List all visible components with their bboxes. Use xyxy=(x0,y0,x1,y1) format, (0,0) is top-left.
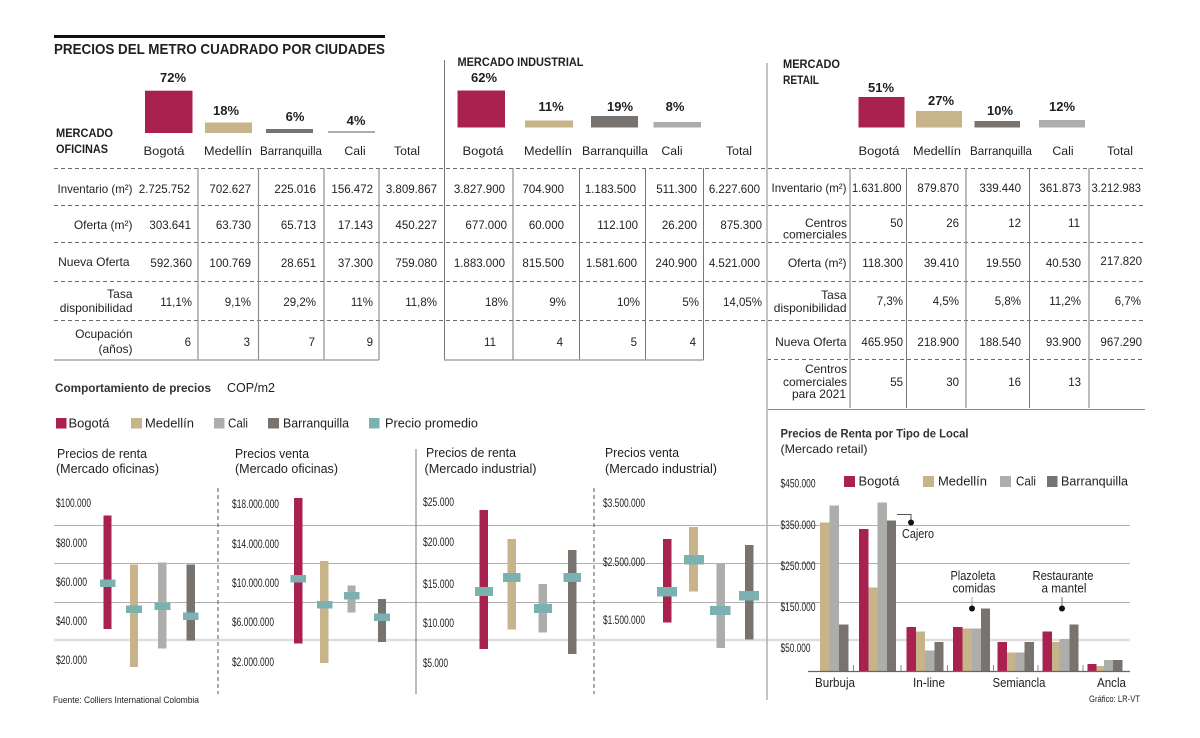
callout: restaurante a mantel: a mantel xyxy=(1042,582,1086,596)
table: retail: comerciales xyxy=(783,375,847,389)
x axis: Burbuja xyxy=(815,676,855,690)
table: oficinas: 3.809.867 xyxy=(386,184,437,196)
chart: precios venta, mercado industrial: $1.500.000 xyxy=(603,615,645,627)
chart: precios de renta, mercado oficinas: $60.000 xyxy=(56,577,87,589)
chart: precios venta, mercado oficinas: (Mercado oficinas) xyxy=(235,462,338,476)
heading: comportamiento de precios: Comportamiento de precios xyxy=(55,381,211,395)
title: PRECIOS DEL METRO CUADRADO POR CIUDADES xyxy=(54,41,385,58)
share bars: retail: 51% xyxy=(868,80,894,95)
chart: precios de renta, mercado oficinas: (Mercado oficinas) xyxy=(56,462,159,476)
share bars: oficinas: 72% xyxy=(160,70,186,85)
column headers: oficinas: Total xyxy=(394,144,420,158)
legend: ciudades y precio promedio: Barranquilla xyxy=(283,416,349,430)
heading: comportamiento de precios: COP/m2 xyxy=(227,381,275,395)
chart heading: Precios de Renta por Tipo de Local xyxy=(780,426,968,440)
table: retail: 339.440 xyxy=(979,183,1021,195)
chart: precios venta, mercado oficinas: $14.000.000 xyxy=(232,539,279,551)
y axis labels: $250.000 xyxy=(780,561,816,573)
column headers: oficinas: Medellín xyxy=(204,144,252,158)
table: retail: 118.300 xyxy=(862,258,903,270)
column headers: oficinas: Barranquilla xyxy=(260,144,322,158)
table: oficinas: Nueva Oferta xyxy=(58,255,130,269)
column headers: retail: Cali xyxy=(1052,144,1074,158)
y axis labels: $150.000 xyxy=(780,602,816,614)
chart: precios venta, mercado industrial: $3.500.000 xyxy=(603,498,645,510)
table: retail: para 2021 xyxy=(792,387,846,401)
chart: precios venta, mercado industrial: (Mercado industrial) xyxy=(605,462,717,476)
y axis labels: $350.000 xyxy=(780,520,816,532)
table: industrial: 14,05% xyxy=(723,297,762,309)
panel: mercado industrial xyxy=(444,57,762,360)
table: industrial: 11 xyxy=(484,337,496,349)
table: oficinas: 37.300 xyxy=(338,258,373,270)
callout: cajero xyxy=(897,514,934,541)
table: industrial: 677.000 xyxy=(465,220,507,232)
legend: ciudades y precio promedio: Precio promedio xyxy=(385,416,478,430)
chart: precios venta, mercado oficinas: $18.000.000 xyxy=(232,499,279,511)
chart: precios venta, mercado oficinas xyxy=(232,447,390,669)
table: industrial: 112.100 xyxy=(597,220,638,232)
table: industrial: 18% xyxy=(485,297,508,309)
table: retail: 6,7% xyxy=(1115,296,1141,308)
table: retail: Tasa xyxy=(821,288,847,302)
chart: precios de renta, mercado oficinas: $20.000 xyxy=(56,655,87,667)
table: retail: 967.290 xyxy=(1100,337,1142,349)
share bars: retail: 10% xyxy=(987,103,1013,118)
table: retail: disponibilidad xyxy=(774,301,846,315)
table: oficinas: 63.730 xyxy=(216,220,251,232)
table: retail: 1.631.800 xyxy=(852,183,902,195)
table: retail: 11 xyxy=(1068,218,1080,230)
table: retail: Centros xyxy=(805,362,847,376)
heading: mercado retail: MERCADO xyxy=(783,59,840,71)
table: retail xyxy=(767,168,1145,410)
table: industrial: 26.200 xyxy=(662,220,697,232)
y axis labels xyxy=(780,478,816,655)
table: retail: Oferta (m²) xyxy=(788,256,846,270)
chart: precios de renta, mercado industrial: (Mercado industrial) xyxy=(424,462,536,476)
chart: precios venta, mercado oficinas: $2.000.000 xyxy=(232,657,274,669)
table: retail: 26 xyxy=(946,218,959,230)
table: retail: 16 xyxy=(1008,377,1021,389)
heading: mercado oficinas: MERCADO xyxy=(56,128,113,140)
table: industrial: 1.183.500 xyxy=(585,184,636,196)
column headers: oficinas: Bogotá xyxy=(144,144,185,158)
table: oficinas: 65.713 xyxy=(281,220,316,232)
table: retail: 7,3% xyxy=(877,296,903,308)
table: retail: Inventario (m²) xyxy=(772,181,846,195)
column headers: retail: Bogotá xyxy=(858,144,900,158)
table: oficinas: 11,1% xyxy=(160,297,192,309)
chart: precios de renta, mercado industrial: $15.000 xyxy=(423,579,454,591)
heading: mercado retail: RETAIL xyxy=(783,75,819,87)
column headers: retail xyxy=(858,144,1133,158)
table: oficinas: Ocupación xyxy=(75,327,132,341)
table: industrial: 4 xyxy=(690,337,697,349)
share bars: retail: 12% xyxy=(1049,99,1075,114)
table: industrial: 6.227.600 xyxy=(709,184,760,196)
table: oficinas: 11% xyxy=(351,297,373,309)
chart: precios de renta, mercado industrial: $10.000 xyxy=(423,618,454,630)
column headers: industrial: Total xyxy=(726,144,752,158)
table: retail: 218.900 xyxy=(917,337,959,349)
chart: precios de renta, mercado oficinas: $80.000 xyxy=(56,538,87,550)
table: retail: 55 xyxy=(890,377,903,389)
share bars: oficinas: 4% xyxy=(347,113,366,128)
table: oficinas: Tasa xyxy=(107,287,133,301)
chart: precios de renta, mercado industrial: $5.000 xyxy=(423,658,448,670)
title xyxy=(54,35,385,58)
table: retail: Centros xyxy=(805,216,847,230)
table: oficinas: 225.016 xyxy=(274,184,316,196)
table: oficinas: 9 xyxy=(367,337,373,349)
legend: retail: Barranquilla xyxy=(1061,474,1128,488)
table: industrial: 875.300 xyxy=(720,220,762,232)
table: retail: 4,5% xyxy=(933,296,959,308)
chart: precios venta, mercado oficinas: $6.000.000 xyxy=(232,617,274,629)
table: oficinas: (años) xyxy=(98,342,133,356)
table: industrial: 9% xyxy=(549,297,566,309)
heading: mercado oficinas: OFICINAS xyxy=(56,144,108,156)
table: retail: comerciales xyxy=(783,228,847,242)
table: oficinas: 702.627 xyxy=(209,184,251,196)
table: industrial: 10% xyxy=(617,297,640,309)
table: oficinas: 9,1% xyxy=(225,297,251,309)
table: oficinas: Oferta (m²) xyxy=(74,218,132,232)
chart: precios de renta, mercado industrial: $20.000 xyxy=(423,537,454,549)
chart: precios de renta, mercado oficinas: $40.000 xyxy=(56,616,87,628)
table: oficinas: 156.472 xyxy=(331,184,373,196)
y axis labels: $450.000 xyxy=(780,478,816,490)
table: retail: 12 xyxy=(1008,218,1021,230)
table: oficinas: 3 xyxy=(244,337,250,349)
table: retail: 879.870 xyxy=(917,183,959,195)
heading: mercado industrial: MERCADO INDUSTRIAL xyxy=(458,57,584,69)
table: retail: 93.900 xyxy=(1046,337,1081,349)
legend: ciudades y precio promedio: Bogotá xyxy=(68,416,110,430)
table: industrial: 4.521.000 xyxy=(709,258,760,270)
legend: retail: Medellín xyxy=(938,474,987,488)
column headers: retail: Barranquilla xyxy=(970,144,1032,158)
share bars: oficinas xyxy=(145,70,375,133)
heading: mercado oficinas xyxy=(56,128,113,156)
table: retail: 30 xyxy=(946,377,959,389)
table: retail: 11,2% xyxy=(1049,296,1081,308)
chart: precios de renta, mercado industrial: Precios de renta xyxy=(426,446,516,460)
column headers: industrial: Cali xyxy=(661,144,683,158)
bars: ancla xyxy=(1088,660,1122,671)
callout: plazoleta comidas: comidas xyxy=(952,582,996,596)
table: industrial: 5% xyxy=(682,297,699,309)
credit: Gráfico: LR-VT xyxy=(1089,694,1140,705)
chart: precios venta, mercado oficinas: Precios venta xyxy=(235,447,309,461)
legend: retail xyxy=(844,474,1128,488)
bars: semiancla xyxy=(998,624,1078,671)
share bars: oficinas: 18% xyxy=(213,103,239,118)
table: industrial xyxy=(444,60,762,360)
legend: retail: Cali xyxy=(1016,474,1036,488)
x axis: Semiancla xyxy=(992,676,1046,690)
callout: plazoleta comidas xyxy=(950,569,996,612)
callout: plazoleta comidas: Plazoleta xyxy=(950,569,996,583)
table: oficinas: Inventario (m²) xyxy=(58,182,132,196)
bars: burbuja xyxy=(820,502,896,671)
heading: mercado retail xyxy=(783,59,840,87)
table: oficinas: 759.080 xyxy=(395,258,437,270)
share bars: retail: 27% xyxy=(928,93,954,108)
legend: ciudades y precio promedio: Medellín xyxy=(145,416,194,430)
column headers: oficinas: Cali xyxy=(344,144,366,158)
table: retail: Nueva Oferta xyxy=(775,335,847,349)
share bars: industrial: 19% xyxy=(607,99,633,114)
table: industrial: 5 xyxy=(631,337,637,349)
table: oficinas: 28.651 xyxy=(281,258,316,270)
table: oficinas: 29,2% xyxy=(283,297,316,309)
chart heading xyxy=(780,426,968,456)
table: oficinas: 7 xyxy=(309,337,315,349)
x axis xyxy=(808,665,1130,690)
callout: restaurante a mantel: Restaurante xyxy=(1032,569,1094,583)
column headers: oficinas xyxy=(144,144,420,158)
table: industrial: 511.300 xyxy=(656,184,697,196)
share bars: industrial: 62% xyxy=(471,70,497,85)
table: industrial: 1.581.600 xyxy=(586,258,637,270)
chart: precios de renta, mercado oficinas: Precios de renta xyxy=(57,447,147,461)
table: industrial: 704.900 xyxy=(522,184,564,196)
share bars: industrial: 8% xyxy=(666,99,685,114)
legend: ciudades y precio promedio: Cali xyxy=(228,416,248,430)
chart: precios venta, mercado industrial xyxy=(603,446,759,648)
callout: restaurante a mantel xyxy=(1032,569,1094,612)
table: industrial: 60.000 xyxy=(529,220,564,232)
table: industrial: 3.827.900 xyxy=(454,184,505,196)
table: industrial: 4 xyxy=(557,337,564,349)
table: industrial: 1.883.000 xyxy=(454,258,505,270)
share bars: oficinas: 6% xyxy=(286,109,305,124)
legend: ciudades y precio promedio xyxy=(56,416,478,430)
table: oficinas: 100.769 xyxy=(209,258,251,270)
column headers: retail: Total xyxy=(1107,144,1133,158)
chart heading: (Mercado retail) xyxy=(780,442,868,456)
table: retail: 465.950 xyxy=(861,337,903,349)
table: retail: 40.530 xyxy=(1046,258,1081,270)
table: oficinas: 17.143 xyxy=(338,220,373,232)
panel: mercado retail xyxy=(767,59,1145,410)
chart: precios de renta por tipo de local xyxy=(780,426,1130,690)
table: retail: 13 xyxy=(1068,377,1081,389)
table: retail: 361.873 xyxy=(1039,183,1081,195)
legend: retail: Bogotá xyxy=(858,474,900,488)
column headers: retail: Medellín xyxy=(913,144,961,158)
table: oficinas: 592.360 xyxy=(150,258,192,270)
table: oficinas: 2.725.752 xyxy=(139,184,190,196)
bars: in-line xyxy=(906,608,990,671)
chart: precios de renta, mercado oficinas xyxy=(56,447,198,667)
chart: precios venta, mercado industrial: Precios venta xyxy=(605,446,679,460)
column headers: industrial xyxy=(462,144,752,158)
column headers: industrial: Medellín xyxy=(524,144,572,158)
chart: precios de renta, mercado industrial: $25.000 xyxy=(423,497,454,509)
table: retail: 19.550 xyxy=(986,258,1021,270)
chart: precios venta, mercado oficinas: $10.000.000 xyxy=(232,578,279,590)
column headers: industrial: Barranquilla xyxy=(582,144,648,158)
chart: precios de renta, mercado oficinas: $100.000 xyxy=(56,498,91,510)
share bars: retail xyxy=(858,80,1085,128)
table: retail: 3.212.983 xyxy=(1092,183,1141,195)
table: retail: 5,8% xyxy=(995,296,1021,308)
table: retail: 217.820 xyxy=(1100,256,1142,268)
chart: precios venta, mercado industrial: $2.500.000 xyxy=(603,557,645,569)
table: retail: 39.410 xyxy=(924,258,959,270)
share bars: industrial xyxy=(458,70,701,128)
table: oficinas xyxy=(54,168,437,360)
share bars: industrial: 11% xyxy=(538,99,564,114)
table: oficinas: disponibilidad xyxy=(60,301,132,315)
table: industrial: 240.900 xyxy=(655,258,697,270)
chart: precios de renta, mercado industrial xyxy=(423,446,581,670)
table: oficinas: 303.641 xyxy=(149,220,191,232)
callout: cajero: Cajero xyxy=(902,527,934,541)
column headers: industrial: Bogotá xyxy=(462,144,504,158)
table: retail: 188.540 xyxy=(979,337,1021,349)
source note: Fuente: Colliers International Colombia xyxy=(53,695,200,706)
panel: mercado oficinas xyxy=(54,70,437,360)
y axis labels: $50.000 xyxy=(780,643,810,655)
table: oficinas: 6 xyxy=(185,337,191,349)
table: oficinas: 450.227 xyxy=(395,220,437,232)
x axis: Ancla xyxy=(1097,676,1126,690)
table: industrial: 815.500 xyxy=(522,258,564,270)
table: retail: 50 xyxy=(890,218,903,230)
table: oficinas: 11,8% xyxy=(405,297,437,309)
x axis: In-line xyxy=(913,676,945,690)
